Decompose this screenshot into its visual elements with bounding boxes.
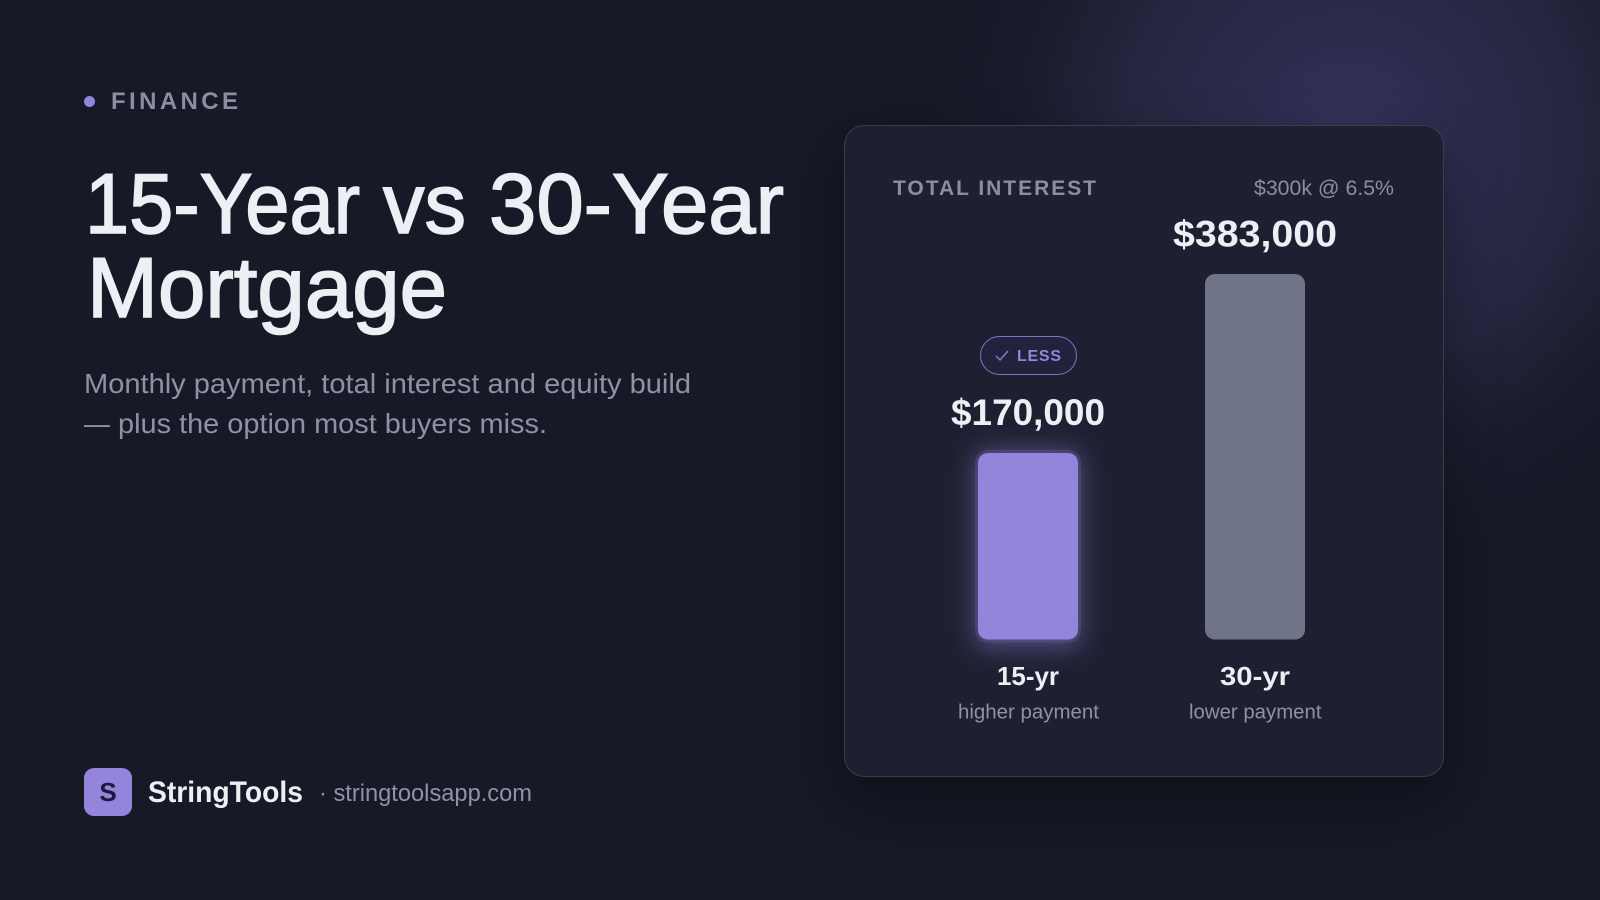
bar chart	[951, 214, 1337, 724]
subtitle: Monthly payment, total interest and equity build	[84, 368, 691, 399]
badge: less: LESS	[1017, 348, 1061, 365]
brand name: StringTools	[148, 776, 303, 809]
logo	[84, 768, 132, 816]
card heading: TOTAL INTEREST	[893, 177, 1096, 200]
website: · stringtoolsapp.com	[319, 780, 532, 807]
title: 15-Year	[85, 157, 360, 252]
eyebrow: finance: FINANCE	[111, 88, 238, 115]
card shadow	[844, 149, 1444, 801]
subtitle: —	[84, 408, 110, 439]
logo: S	[99, 777, 117, 807]
title: vs	[383, 157, 466, 252]
subtitle: plus the option most buyers miss.	[118, 408, 547, 439]
icon: check	[996, 351, 1008, 360]
value: 170,000: $170,000	[951, 392, 1105, 433]
sublabel: higher payment: higher payment	[958, 702, 1099, 724]
title: 30-Year	[489, 157, 784, 252]
value: 383,000: $383,000	[1173, 214, 1337, 254]
title	[85, 157, 784, 336]
label: 30-yr: 30-yr	[1220, 661, 1290, 691]
title: Mortgage	[87, 241, 447, 336]
background glow	[900, 0, 1600, 600]
subtitle	[84, 368, 691, 439]
badge: less	[980, 336, 1076, 374]
bar: 15-yr	[978, 453, 1078, 640]
bar: 30-yr	[1205, 274, 1305, 640]
column: 30-yr	[1173, 214, 1337, 724]
panel: total interest card	[844, 126, 1444, 776]
bar glow	[974, 449, 1082, 649]
footer brand	[84, 768, 532, 816]
column: 15-yr	[951, 336, 1105, 724]
sublabel: lower payment: lower payment	[1189, 702, 1322, 724]
card note: $300k @ 6.5%	[1254, 177, 1394, 200]
label: 15-yr: 15-yr	[997, 661, 1059, 691]
